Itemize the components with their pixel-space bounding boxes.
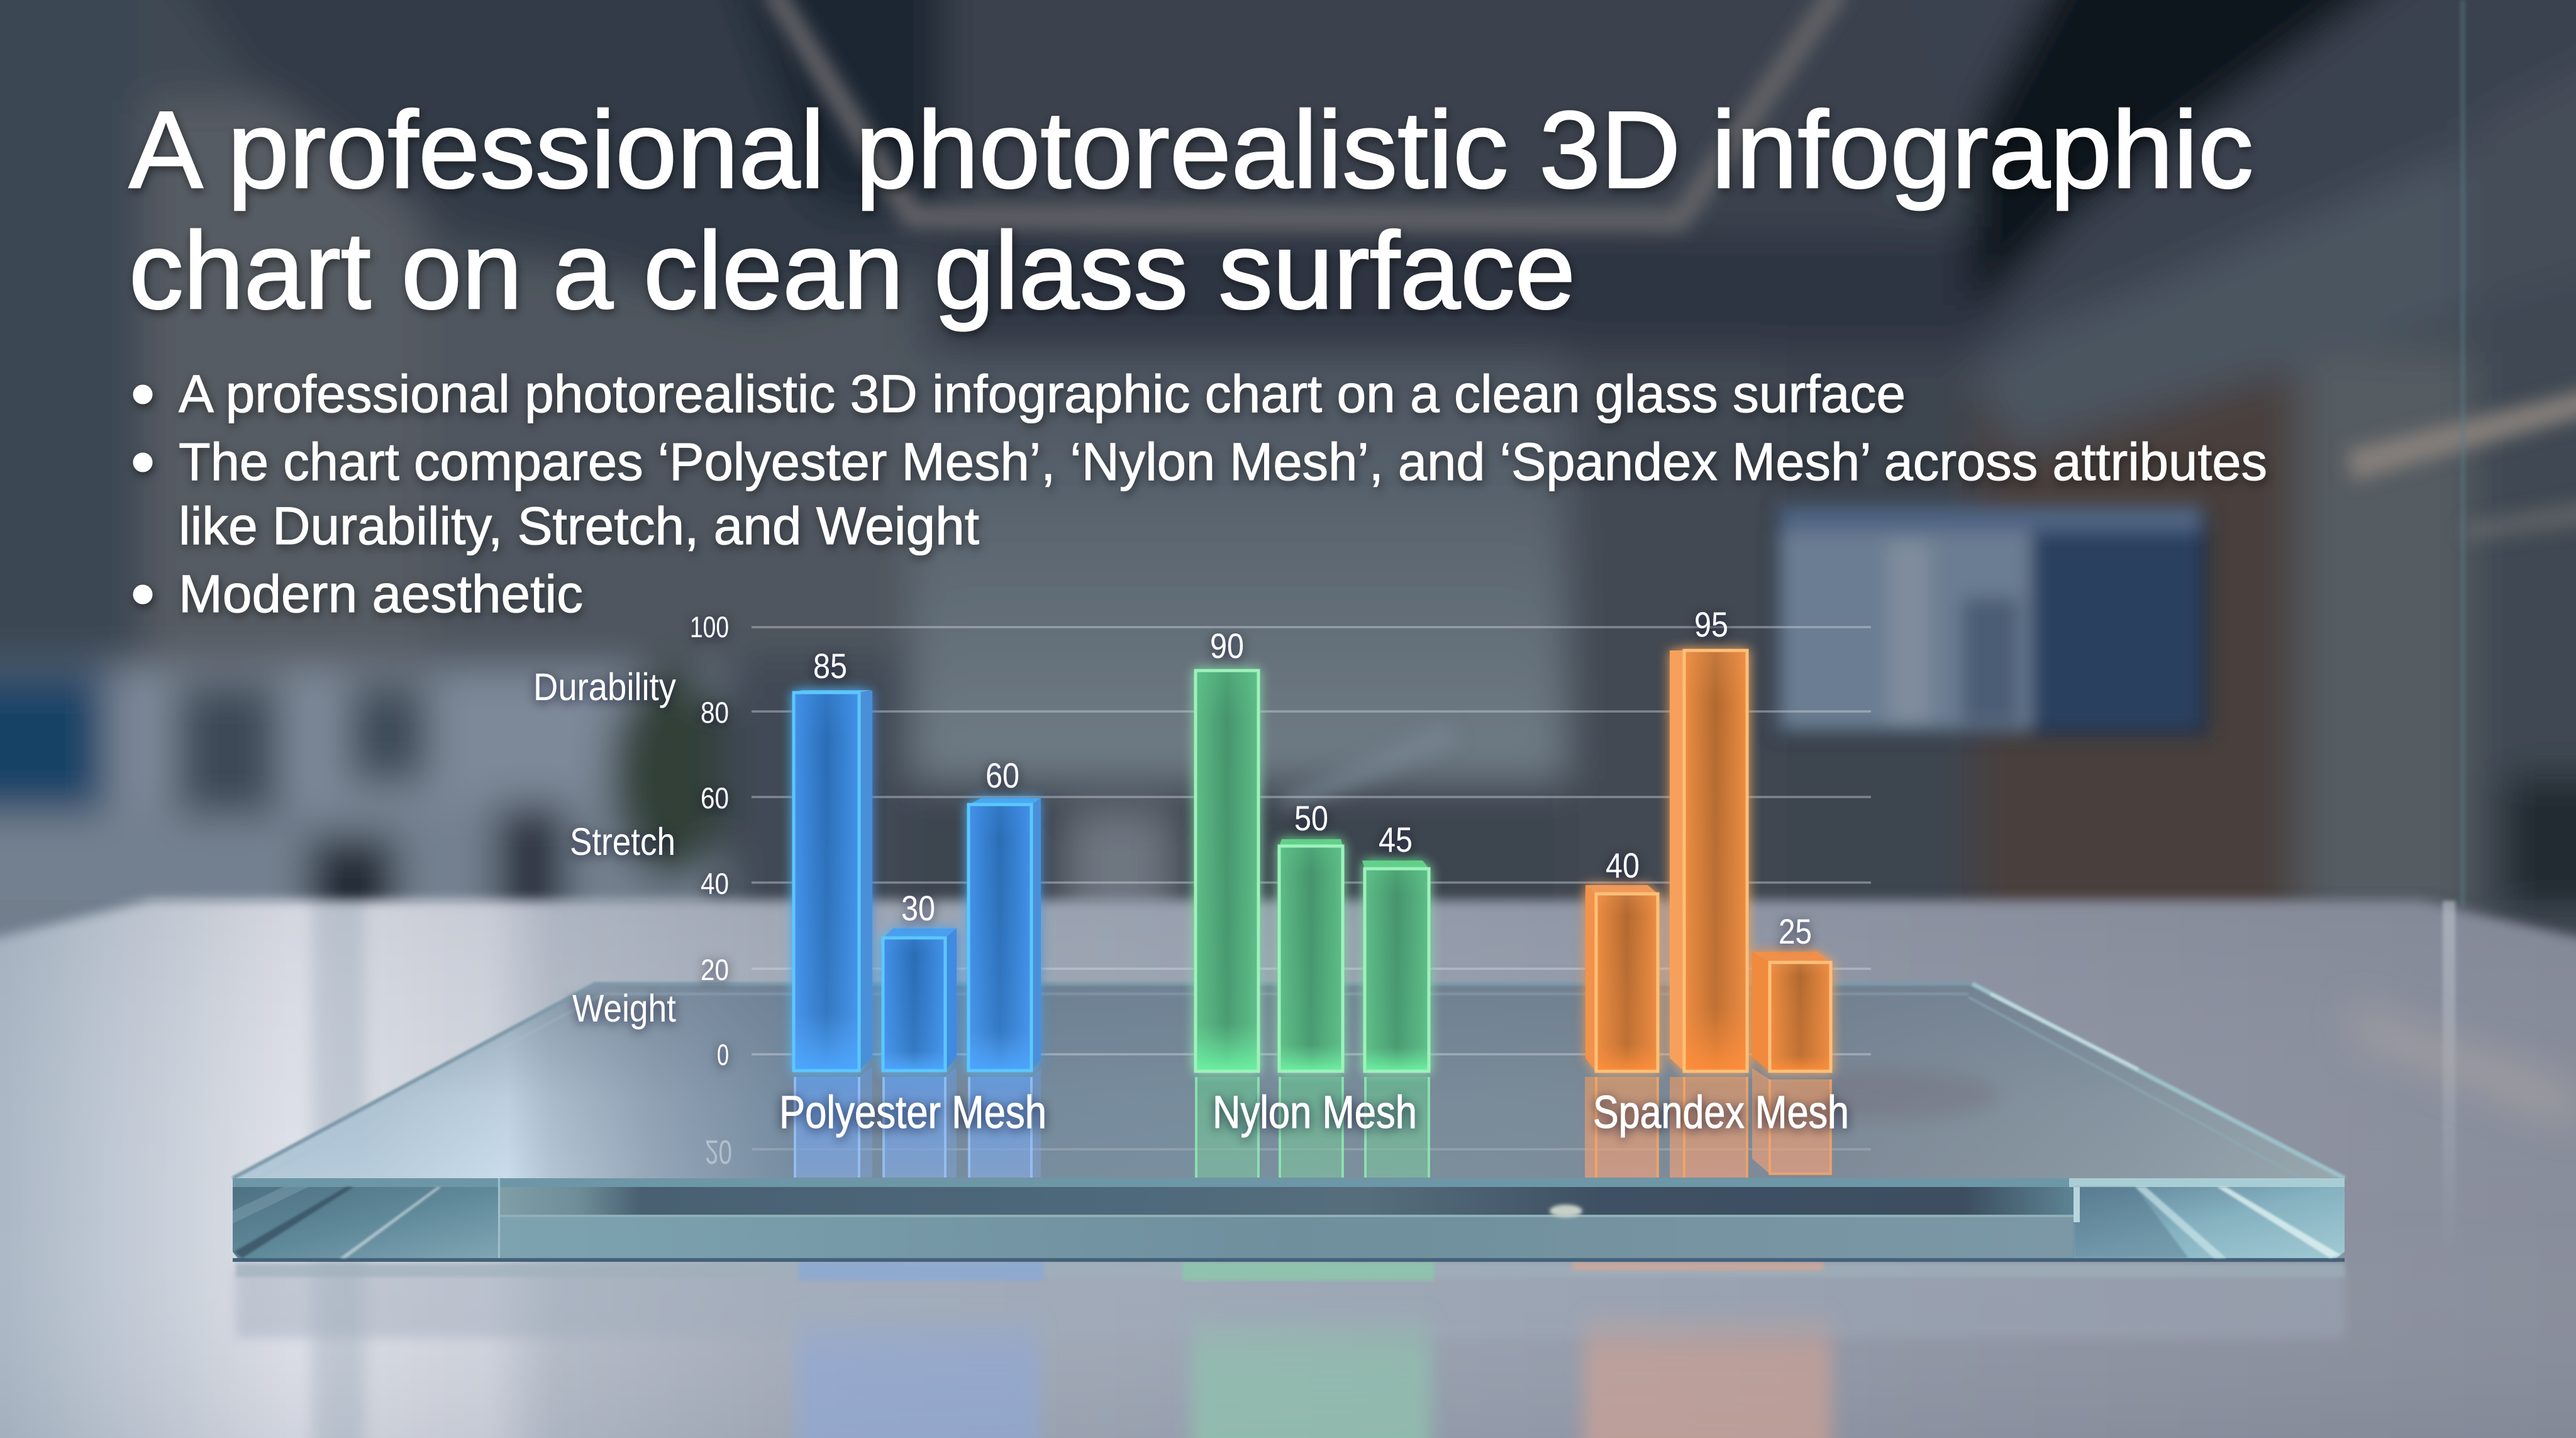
right dark ceiling — [1887, 0, 2576, 346]
bar value labels — [813, 605, 1812, 951]
category labels: Nylon Mesh — [1213, 1087, 1417, 1138]
centre-left wall — [421, 264, 912, 654]
y axis tick labels — [690, 610, 729, 1071]
bar value labels: 40 — [1606, 845, 1640, 885]
bar value labels: 30 — [901, 888, 935, 928]
bar value labels: 45 — [1379, 820, 1413, 859]
bar: Polyester Durability 85 — [794, 690, 872, 1071]
bar group: Spandex Mesh — [1585, 650, 1831, 1071]
bar reflections — [795, 1067, 1831, 1178]
title: chart on a clean glass surface — [129, 209, 1575, 332]
slab right corner — [2074, 1187, 2345, 1258]
bar: Nylon Durability 90 — [1196, 671, 1258, 1071]
category labels: Polyester Mesh — [779, 1087, 1046, 1138]
central glass wall — [912, 349, 1566, 780]
chart — [533, 605, 1871, 1178]
bar group: Nylon Mesh — [1196, 671, 1429, 1071]
attribute labels: Durability — [533, 666, 676, 708]
slab front band — [500, 1187, 2074, 1215]
bar group: Polyester Mesh — [794, 690, 1041, 1071]
slab left corner — [233, 1187, 500, 1258]
bullet 2 — [133, 432, 2267, 555]
left wall — [145, 101, 421, 667]
table surface — [0, 900, 2576, 1438]
lower-left office — [0, 667, 723, 981]
plant — [610, 667, 736, 881]
bar: Spandex Durability 40 — [1585, 885, 1658, 1071]
grid lines — [752, 627, 1871, 1149]
bar: Polyester Weight 60 — [969, 798, 1041, 1071]
ceiling reflections — [1277, 384, 2576, 811]
ceiling light strips — [770, 0, 1840, 220]
attribute labels: Weight — [572, 987, 676, 1030]
glass partition line — [2460, 0, 2465, 906]
wall monitor — [1775, 506, 2209, 736]
slab right edge — [1972, 984, 2345, 1178]
bar value labels: 50 — [1294, 798, 1328, 838]
glass slab — [233, 984, 2345, 1262]
category labels — [779, 1087, 1849, 1138]
glass slab reflection on table — [236, 1262, 2345, 1438]
bar: Polyester Stretch 30 — [883, 928, 957, 1071]
bar: Spandex Stretch 95 — [1670, 650, 1747, 1071]
title — [129, 88, 2253, 332]
bullet list — [133, 364, 2267, 623]
bar value labels: 95 — [1694, 605, 1728, 644]
mirrored axis tick reflection: 20 — [705, 1133, 732, 1171]
coloured bar reflections — [797, 1308, 1831, 1438]
bar value labels: 90 — [1210, 626, 1244, 666]
y axis tick labels: 0 — [717, 1038, 729, 1071]
background: blurred office — [0, 0, 2576, 1006]
bar: Spandex Weight 25 — [1752, 952, 1831, 1071]
reflection: green bars — [1196, 1077, 1429, 1178]
bar value labels: 60 — [985, 755, 1019, 795]
bar: Nylon Stretch 50 — [1279, 839, 1343, 1071]
reflection: blue bars — [795, 1067, 1041, 1178]
y axis tick labels: 60 — [701, 781, 729, 815]
slab front lip — [233, 1178, 2345, 1187]
category labels: Spandex Mesh — [1593, 1087, 1849, 1138]
bullet 1: A professional photorealistic 3D infographic chart on a clean glass surface — [179, 364, 1906, 423]
y axis tick labels: 80 — [701, 696, 729, 729]
title: A professional photorealistic 3D infographic — [129, 88, 2253, 211]
bar: Nylon Weight 45 — [1362, 861, 1429, 1071]
chairs right — [2503, 774, 2576, 912]
bullet 2: like Durability, Stretch, and Weight — [179, 496, 979, 555]
slab back edge — [233, 984, 1972, 1178]
bar value labels: 25 — [1779, 911, 1812, 951]
y axis tick labels: 20 — [701, 953, 729, 986]
bullet 2: The chart compares ‘Polyester Mesh’, ‘Nylon Mesh’, and ‘Spandex Mesh’ across attributes — [179, 432, 2267, 491]
y axis tick labels: 100 — [690, 610, 729, 644]
right wall and wooden panel — [1774, 352, 1981, 918]
reflection: orange bars — [1585, 1068, 1831, 1178]
bar value labels: 85 — [813, 646, 847, 686]
bullet 3: Modern aesthetic — [179, 564, 583, 623]
y axis tick labels: 40 — [701, 867, 729, 900]
ceiling dark — [151, 0, 1069, 315]
slab top face — [233, 984, 2345, 1178]
attribute labels — [533, 666, 676, 1030]
attribute labels: Stretch — [570, 820, 675, 863]
left column — [0, 0, 138, 692]
